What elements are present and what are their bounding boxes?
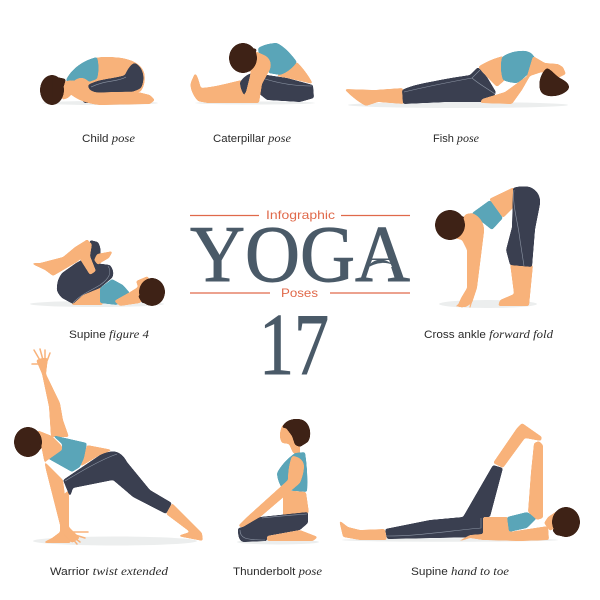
pose: supine hand to toe	[339, 423, 580, 545]
pose: thunderbolt	[237, 419, 319, 544]
pose: caterpillar	[191, 43, 315, 104]
label: caterpillar pose: Caterpillar pose	[213, 131, 292, 145]
pose: supine figure 4	[30, 239, 165, 307]
pose: cross ankle forward fold	[435, 186, 540, 308]
label: thunderbolt pose: Thunderbolt pose	[233, 564, 323, 578]
label: child pose: Child pose	[82, 131, 136, 145]
heading: YOGA: YOGA	[190, 211, 410, 299]
pose: fish	[344, 51, 569, 108]
pose: warrior twist extended	[14, 349, 203, 546]
label: warrior twist extended: Warrior twist extended	[50, 564, 169, 578]
heading: Infographic: Infographic	[266, 208, 335, 222]
infographic title	[190, 208, 410, 394]
number: 17: 17	[259, 297, 329, 394]
label: supine figure 4: Supine figure 4	[69, 327, 149, 341]
label: supine hand to toe: Supine hand to toe	[411, 564, 510, 578]
pose: child	[40, 57, 158, 105]
label: cross ankle forward fold: Cross ankle forward fold	[424, 327, 554, 341]
label: fish pose: Fish pose	[433, 131, 480, 145]
subheading: Poses: Poses	[281, 286, 318, 300]
